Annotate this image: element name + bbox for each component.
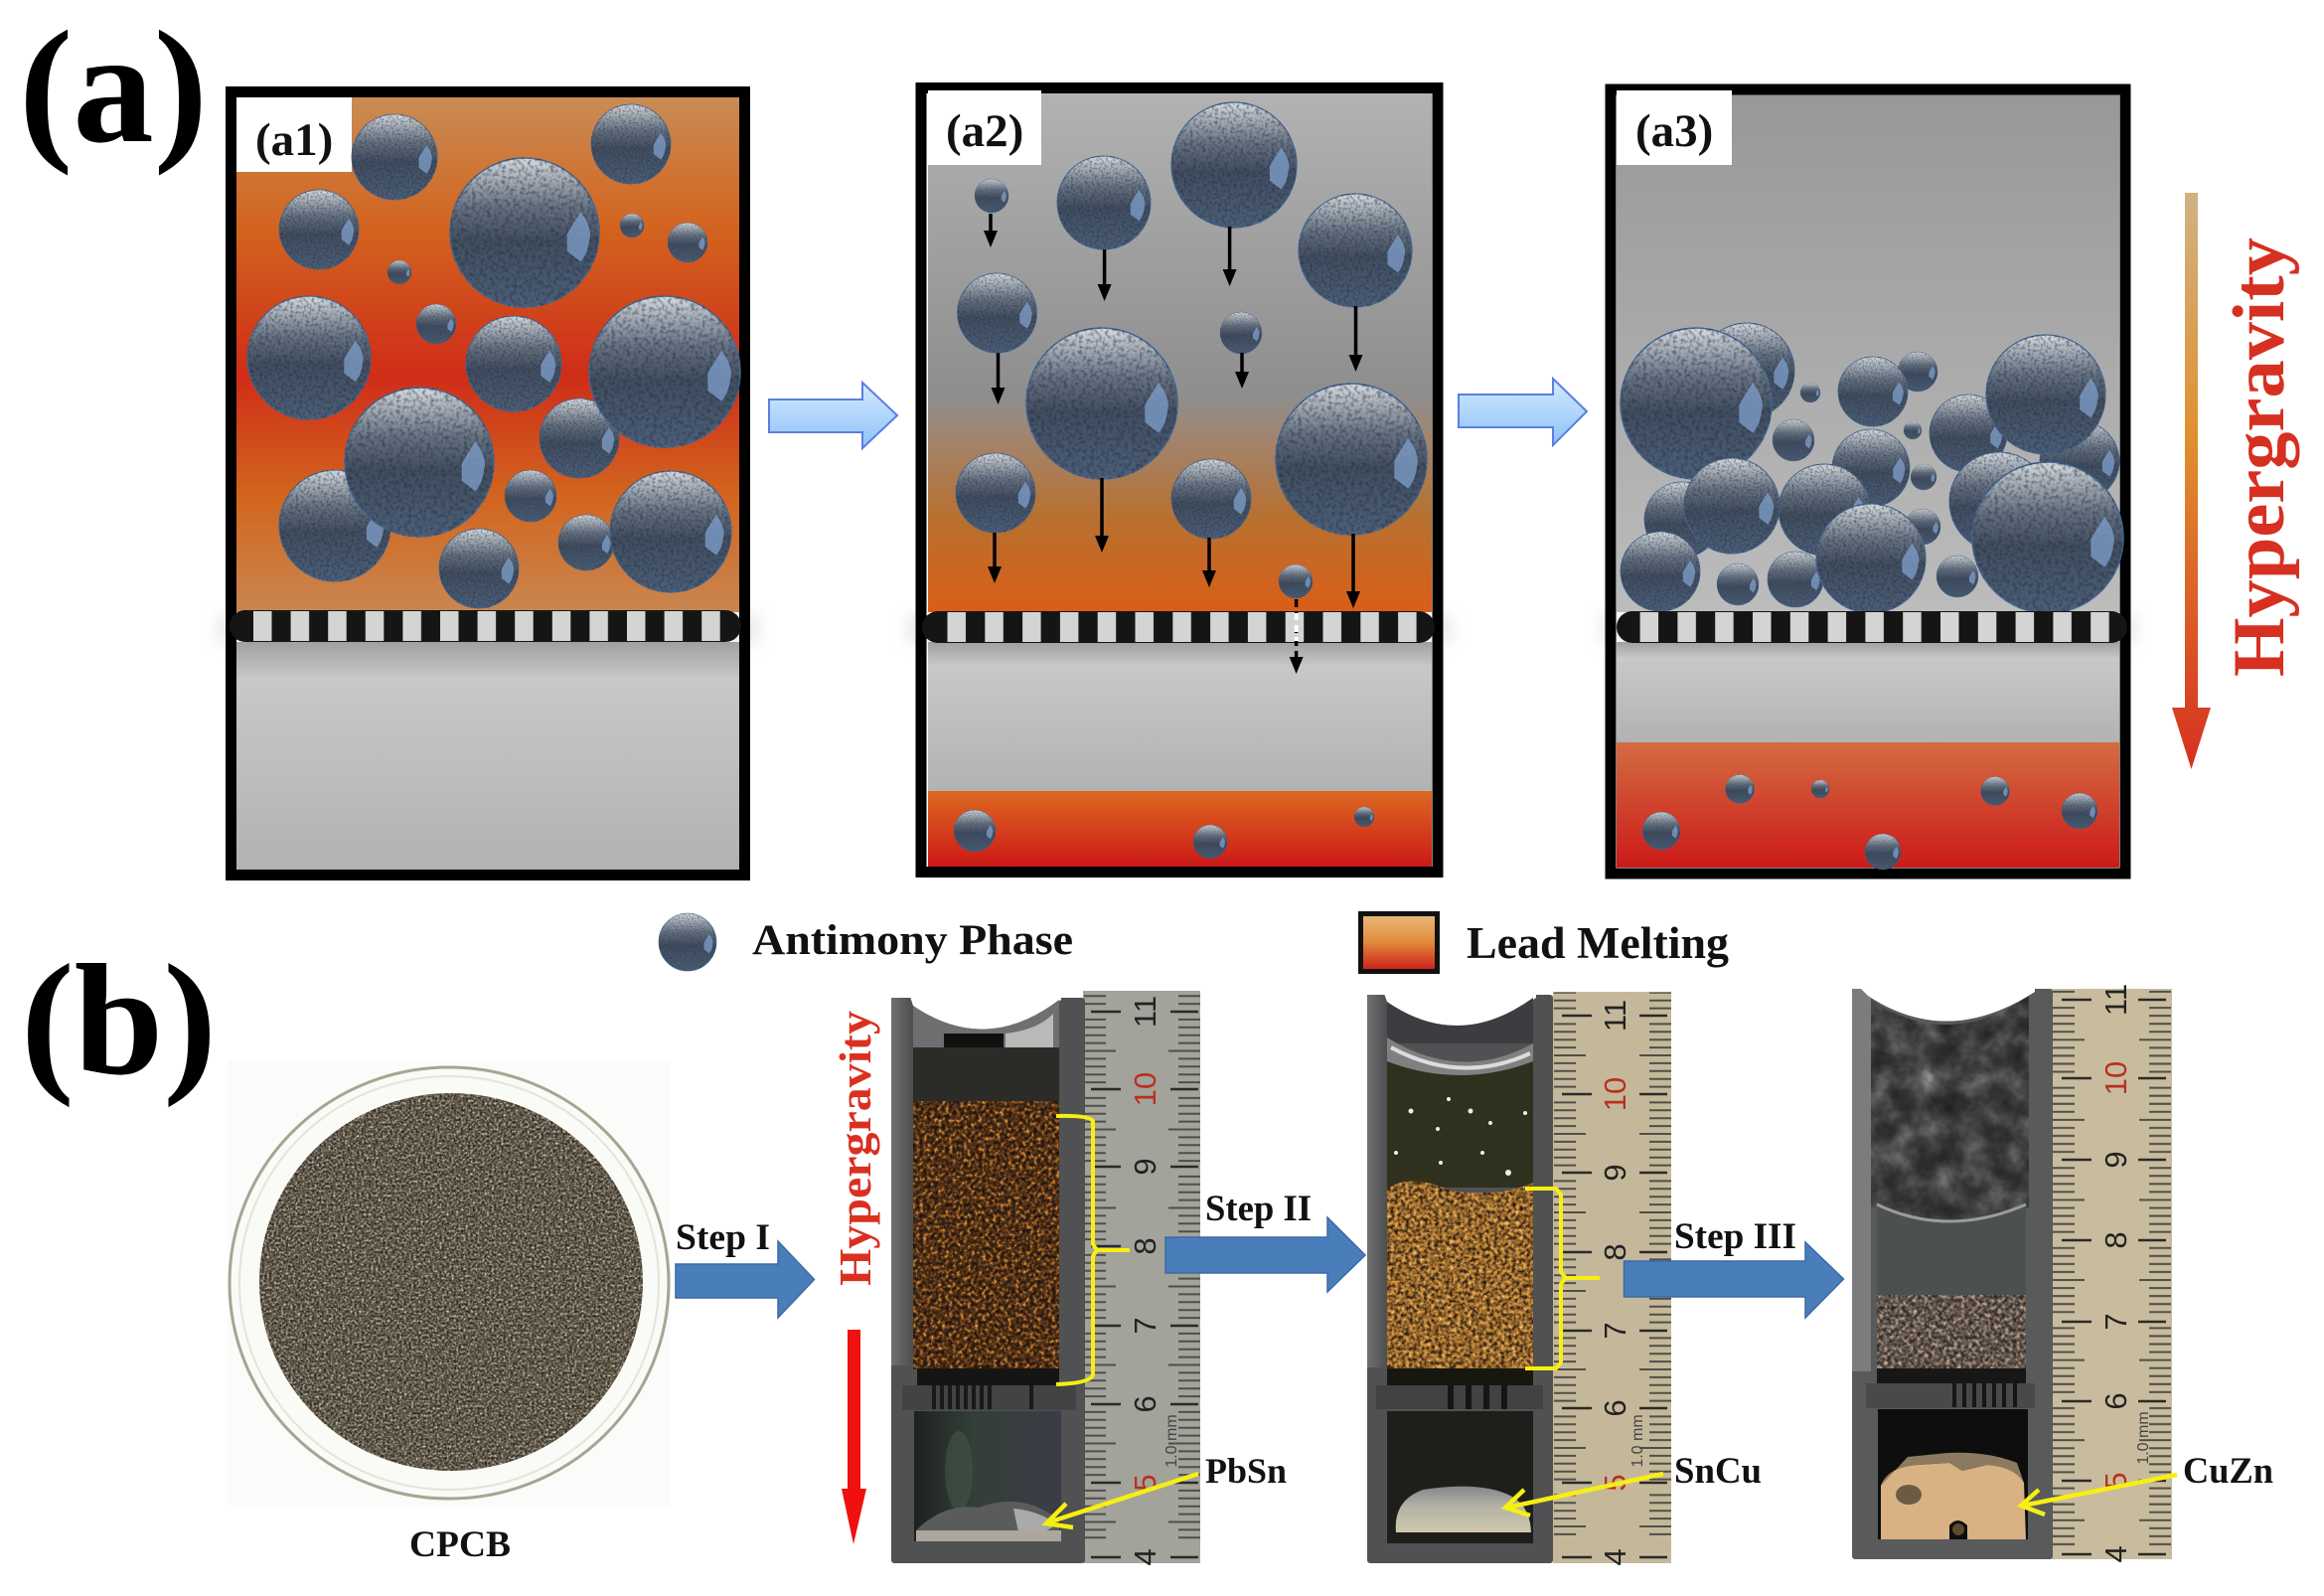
ruler 2: 1.0 mm [1629,1414,1646,1468]
antimony bubbles: a2 [954,102,1427,859]
ruler 3: 7 [2098,1313,2133,1331]
hypergravity arrow: panel a [2172,193,2211,769]
photo: CPCB dish [228,1060,671,1506]
panel: a3 [1600,89,2137,874]
panel: a2 [906,87,1452,873]
ruler 2: 10 [1598,1077,1632,1111]
legend: lead melting [1361,914,1730,972]
heading: (b): (b) [21,931,217,1108]
hypergravity label: panel a: Hypergravity [2219,238,2300,677]
pointer arrow: PbSn [1046,1474,1198,1527]
ruler 3: 5 [2098,1472,2133,1490]
hypergravity label: panel b: Hypergravity [830,1011,880,1286]
ruler 3: 8 [2098,1231,2133,1249]
ruler 2: 8 [1598,1243,1632,1261]
step III label: Step III [1674,1216,1796,1257]
ruler 3: 1.0 mm [2135,1411,2152,1465]
ruler 3: 10 [2098,1061,2133,1095]
step II label: Step II [1205,1189,1312,1229]
filter mesh: a2 [922,611,1435,643]
arrow: a2 to a3 [1459,379,1587,445]
ruler 2: 7 [1598,1322,1632,1340]
ruler 1 [1083,991,1200,1566]
ruler 2: 6 [1598,1399,1632,1417]
ruler 2 [1553,992,1671,1566]
ruler 1: 9 [1128,1158,1162,1176]
crucible 2: SnCu [1367,991,1553,1563]
legend: antimony phase: Antimony Phase [752,917,1073,964]
filter mesh: a3 [1617,611,2127,643]
step II arrow [1165,1217,1365,1292]
legend: antimony phase [659,913,1073,971]
ruler 3: 9 [2098,1151,2133,1169]
bracket 1 [1056,1116,1130,1384]
ruler 1: 11 [1128,996,1162,1028]
step I arrow [676,1241,815,1318]
ruler 2: 9 [1598,1164,1632,1182]
ruler 2: 4 [1598,1548,1632,1566]
label: a2: (a2) [946,105,1023,157]
label: PbSn: PbSn [1205,1451,1287,1491]
heading: (a): (a) [19,0,208,177]
panel: a1 [217,91,760,875]
ruler 2: 11 [1598,1000,1632,1032]
legend: lead melting: Lead Melting [1467,918,1730,968]
filter mesh: a1 [230,610,741,642]
label: SnCu: SnCu [1674,1451,1762,1492]
ruler 3: 4 [2098,1545,2133,1563]
step III arrow [1624,1242,1844,1318]
caption: CPCB: CPCB [409,1524,511,1565]
label: a2 [928,90,1041,165]
ruler 1: 5 [1128,1474,1162,1492]
ruler 1: 6 [1128,1395,1162,1413]
ruler 1: 10 [1128,1072,1162,1106]
ruler 3 [2051,984,2172,1563]
ruler 1: 7 [1128,1317,1162,1335]
arrow: a1 to a2 [769,383,897,448]
pointer arrow: CuZn [2021,1475,2177,1515]
label: a1 [236,97,352,172]
crucible 3: CuZn [1852,984,2053,1559]
settling arrows: a2 [984,214,1363,674]
label: a1: (a1) [255,114,333,166]
ruler 1: 1.0 mm [1163,1414,1180,1468]
pointer arrow: SnCu [1505,1474,1663,1516]
ruler 3: 6 [2098,1392,2133,1410]
bracket 2 [1525,1189,1600,1368]
step I label: Step I [676,1217,770,1258]
label: a3: (a3) [1635,105,1713,157]
label: a3 [1617,90,1732,165]
antimony bubbles: a1 [247,104,740,608]
ruler 1: 8 [1128,1237,1162,1255]
ruler 2: 5 [1598,1474,1632,1492]
red hypergravity arrow: panel b [842,1330,866,1544]
antimony bubbles: a3 [1621,323,2123,870]
crucible 1: PbSn [891,994,1085,1563]
ruler 1: 4 [1128,1548,1162,1566]
ruler 3: 11 [2098,984,2133,1016]
label: CuZn: CuZn [2183,1451,2273,1492]
